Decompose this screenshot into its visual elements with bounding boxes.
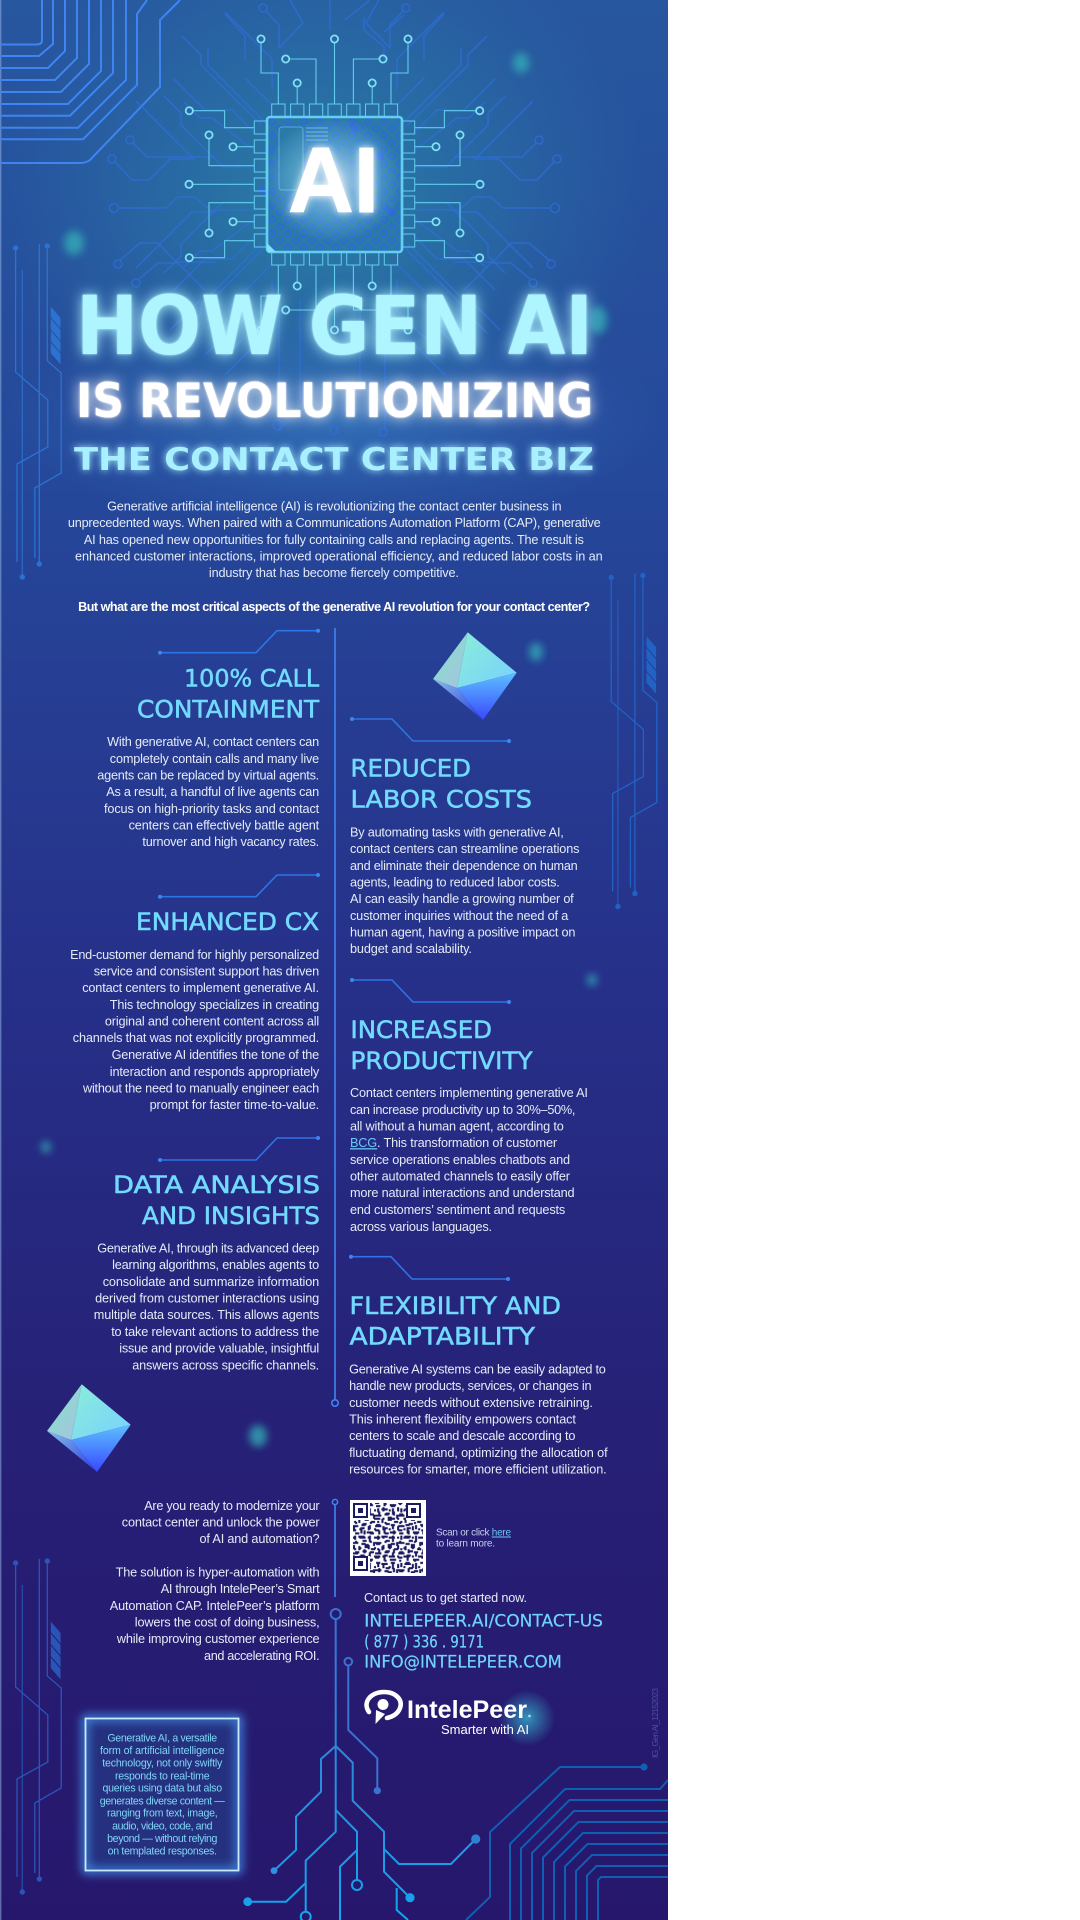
heading: 100% CALL xyxy=(184,665,320,693)
call to action text: AI through IntelePeer’s Smart xyxy=(161,1582,320,1596)
body: By automating tasks with generative AI, xyxy=(350,826,564,840)
logo: IntelePeer xyxy=(367,1690,555,1746)
title xyxy=(74,280,594,478)
callout box: queries using data but also xyxy=(102,1783,222,1795)
body: handle new products, services, or changes in xyxy=(349,1379,592,1393)
callout box: Generative AI, a versatile xyxy=(107,1733,217,1745)
body: issue and provide valuable, insightful xyxy=(119,1342,319,1356)
body: derived from customer interactions using xyxy=(95,1292,319,1306)
heading xyxy=(349,1296,560,1345)
title: HOW GEN AI xyxy=(76,280,593,374)
body: consolidate and summarize information xyxy=(103,1275,319,1289)
call to action text: while improving customer experience xyxy=(116,1632,320,1646)
body: centers to scale and descale according to xyxy=(349,1429,575,1443)
body: interaction and responds appropriately xyxy=(110,1065,320,1079)
contact block: INTELEPEER.AI/CONTACT-US xyxy=(364,1612,603,1631)
body: learning algorithms, enables agents to xyxy=(112,1258,319,1272)
short divider beside QR xyxy=(332,1499,338,1597)
body: completely contain calls and many live xyxy=(110,752,319,766)
call to action text: The solution is hyper-automation with xyxy=(116,1566,320,1580)
heading: ADAPTABILITY xyxy=(350,1322,535,1350)
callout box: ranging from text, image, xyxy=(107,1808,218,1820)
callout box: technology, not only swiftly xyxy=(102,1758,223,1770)
callout box: audio, video, code, and xyxy=(112,1820,213,1832)
body: budget and scalability. xyxy=(350,942,472,956)
section: reduced labor costs xyxy=(350,717,580,956)
body: Generative AI systems can be easily adapted to xyxy=(349,1362,606,1376)
body xyxy=(70,948,320,1112)
body: This inherent flexibility empowers contact xyxy=(349,1412,576,1426)
callout box: beyond — without relying xyxy=(107,1833,218,1845)
body: can increase productivity up to 30%–50%, xyxy=(350,1103,575,1117)
heading: REDUCED xyxy=(350,755,471,783)
body: resources for smarter, more efficient utilization. xyxy=(349,1462,607,1476)
body: As a result, a handful of live agents can xyxy=(106,785,319,799)
body: service and consistent support has driven xyxy=(94,964,319,978)
heading xyxy=(115,1175,319,1224)
center divider line xyxy=(332,628,338,1406)
vertical job code: IG_Gen AI_12152023 xyxy=(650,1688,660,1758)
body: human agent, having a positive impact on xyxy=(350,926,575,940)
intro paragraph: enhanced customer interactions, improved operational efficiency, and reduced labor costs in an xyxy=(75,550,603,564)
body: multiple data sources. This allows agents xyxy=(94,1308,319,1322)
chip background glow xyxy=(58,0,581,394)
qr caption xyxy=(436,1528,511,1550)
section: data analysis and insights xyxy=(94,1136,320,1372)
heading: FLEXIBILITY AND xyxy=(350,1292,561,1320)
heading xyxy=(352,758,531,808)
body: prompt for faster time-to-value. xyxy=(150,1098,319,1112)
circuit traces: top left corner xyxy=(0,0,180,163)
body: Generative AI identifies the tone of the xyxy=(112,1048,319,1062)
callout box xyxy=(85,1718,239,1871)
circuit traces: blue radial background around chip xyxy=(108,0,561,436)
logo: IntelePeer: IntelePeer xyxy=(407,1696,527,1724)
icon: AI microchip: AI xyxy=(288,128,379,232)
call to action text: Are you ready to modernize your xyxy=(144,1499,320,1513)
connector xyxy=(350,978,511,1004)
body: Contact centers implementing generative AI xyxy=(350,1086,588,1100)
intro paragraph: industry that has become fiercely competitive. xyxy=(209,566,459,580)
body: turnover and high vacancy rates. xyxy=(142,835,319,849)
intro paragraph: Generative artificial intelligence (AI) is revolutionizing the contact center business in xyxy=(107,500,562,514)
body: and eliminate their dependence on human xyxy=(350,859,578,873)
call to action text: Automation CAP. IntelePeer’s platform xyxy=(110,1599,320,1613)
body: end customers’ sentiment and requests xyxy=(350,1203,565,1217)
body: without the need to manually engineer each xyxy=(82,1082,319,1096)
connector xyxy=(350,717,511,743)
icon: lower gem xyxy=(47,1384,131,1472)
circuit traces: bottom right corner xyxy=(466,1764,668,1920)
body: contact centers to implement generative AI. xyxy=(82,981,319,995)
left side circuit decoration: top xyxy=(13,244,61,579)
connector xyxy=(158,873,320,899)
infographic canvas xyxy=(0,0,668,1920)
body: With generative AI, contact centers can xyxy=(107,735,319,749)
section: increased productivity xyxy=(350,978,588,1234)
qr code xyxy=(350,1500,426,1576)
body: answers across specific channels. xyxy=(132,1358,319,1372)
body: service operations enables chatbots and xyxy=(350,1153,570,1167)
intro paragraph: unprecedented ways. When paired with a Communications Automation Platform (CAP), generative xyxy=(68,516,601,530)
body: to take relevant actions to address the xyxy=(111,1325,319,1339)
body: fluctuating demand, optimizing the allocation of xyxy=(349,1446,608,1460)
section: 100% call containment xyxy=(97,629,320,849)
heading: CONTAINMENT xyxy=(137,696,320,724)
body: customer needs without extensive retraining. xyxy=(349,1396,593,1410)
body: other automated channels to easily offer xyxy=(350,1170,571,1184)
connector xyxy=(158,629,320,655)
icon: AI microchip xyxy=(185,35,484,334)
body: channels that was not explicitly programmed. xyxy=(73,1031,319,1045)
body xyxy=(350,826,580,956)
body: focus on high-priority tasks and contact xyxy=(104,802,320,816)
title backing glow xyxy=(94,354,574,502)
left side circuit decoration: bottom xyxy=(13,1559,61,1894)
body: agents can be replaced by virtual agents. xyxy=(97,768,319,782)
heading: ENHANCED CX xyxy=(136,908,319,936)
heading: LABOR COSTS xyxy=(350,786,532,814)
body: contact centers can streamline operations xyxy=(350,842,580,856)
contact block: ( 877 ) 336 . 9171 xyxy=(364,1633,484,1652)
right side circuit decoration xyxy=(609,573,657,909)
blue teal glow specks xyxy=(41,53,607,1447)
body: AI can easily handle a growing number of xyxy=(350,892,574,906)
logo: IntelePeer: Smarter with AI xyxy=(441,1722,529,1737)
heading: INCREASED xyxy=(350,1016,492,1044)
call to action text: of AI and automation? xyxy=(200,1532,320,1546)
callout box: on templated responses. xyxy=(108,1845,217,1857)
body: This technology specializes in creating xyxy=(110,998,319,1012)
call to action text: contact center and unlock the power xyxy=(122,1516,320,1530)
connector xyxy=(158,1136,320,1162)
panel background xyxy=(0,0,668,1920)
title: IS REVOLUTIONIZING xyxy=(76,374,593,429)
body: End-customer demand for highly personalized xyxy=(70,948,319,962)
callout box: form of artificial intelligence xyxy=(100,1745,225,1757)
body: Generative AI, through its advanced deep xyxy=(97,1242,319,1256)
body: customer inquiries without the need of a xyxy=(350,909,569,923)
call to action text xyxy=(110,1499,320,1663)
body: centers can effectively battle agent xyxy=(129,818,320,832)
call to action text: lowers the cost of doing business, xyxy=(135,1616,320,1630)
circuit tree xyxy=(248,1609,476,1920)
body: agents, leading to reduced labor costs. xyxy=(350,876,560,890)
heading: DATA ANALYSIS xyxy=(113,1171,320,1199)
heading: PRODUCTIVITY xyxy=(350,1047,533,1075)
left edge highlight xyxy=(0,0,1,1920)
callout box: responds to real-time xyxy=(115,1770,210,1782)
body: across various languages. xyxy=(350,1220,492,1234)
qr caption: to learn more. xyxy=(436,1538,495,1550)
body xyxy=(94,1242,319,1372)
bold question: But what are the most critical aspects of the generative AI revolution for your contact center? xyxy=(78,600,590,614)
body: more natural interactions and understand xyxy=(350,1186,575,1200)
call to action text: and accelerating ROI. xyxy=(204,1649,320,1663)
heading xyxy=(352,1020,533,1070)
body: original and coherent content across all xyxy=(105,1014,319,1028)
section: enhanced cx xyxy=(70,873,320,1112)
contact block xyxy=(364,1591,603,1672)
qr caption: Scan or click here xyxy=(436,1528,511,1538)
body xyxy=(349,1362,608,1476)
callout box: generates diverse content — xyxy=(100,1795,225,1807)
circuit tree end dots xyxy=(243,1787,480,1906)
icon: top gem xyxy=(433,632,517,720)
heading: AND INSIGHTS xyxy=(142,1202,320,1230)
connector xyxy=(349,1255,510,1281)
body xyxy=(350,1086,588,1234)
body: BCG. This transformation of customer xyxy=(350,1136,558,1150)
intro paragraph xyxy=(68,500,603,580)
intro paragraph: AI has opened new opportunities for fully containing calls and replacing agents. The result is xyxy=(84,533,584,547)
body xyxy=(97,735,320,849)
title: THE CONTACT CENTER BIZ xyxy=(74,442,594,478)
section: flexibility and adaptability xyxy=(349,1255,608,1476)
heading xyxy=(138,668,320,718)
contact block: INFO@INTELEPEER.COM xyxy=(364,1653,562,1672)
body: all without a human agent, according to xyxy=(350,1120,564,1134)
contact block: Contact us to get started now. xyxy=(364,1591,527,1605)
